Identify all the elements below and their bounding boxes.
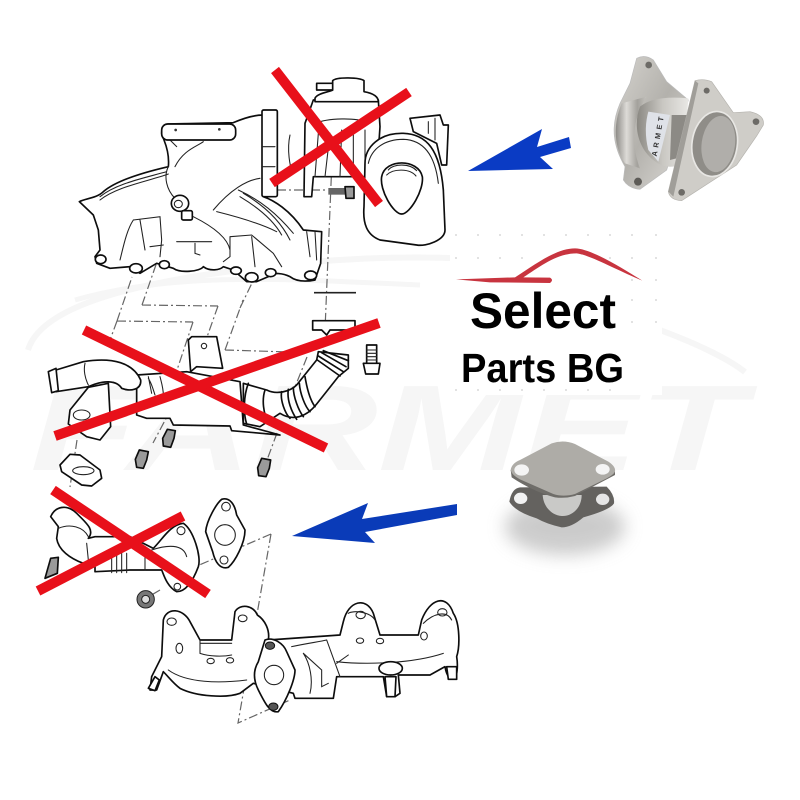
flange bore [688,108,742,180]
small bolt [328,187,354,198]
dashed assembly guide lines [70,160,332,723]
oval gasket [206,499,245,568]
red cross: EGR valve [272,70,409,204]
hex bolt [363,345,380,374]
small bolts [135,429,271,477]
rear flange [614,57,688,189]
watermark: car outline and brand: FARMET [30,360,758,496]
lower EGR body [68,383,111,440]
small gasket [60,454,102,486]
connecting tube [637,98,688,167]
left tube [56,360,141,392]
bellows pipe [243,352,348,427]
logo text: Parts BG: Parts BG [461,345,624,391]
thin seal [314,290,356,295]
hex nut [137,591,154,608]
teardrop port [381,163,422,214]
logo: red car roofline [456,248,642,283]
red cross: cooler tube [55,323,379,448]
red cross: EGR pipe [38,490,208,594]
top flange [313,321,355,335]
logo text: Select: Select [470,283,616,339]
top plate [511,470,615,498]
side connector [410,115,448,165]
manifold studs [148,662,457,697]
diagram: intake manifold with EGR valve [79,78,448,293]
lower gasket [509,487,614,527]
flange plate [262,110,277,197]
valve cap [315,78,378,102]
diagram: EGR cooler tube assembly [48,321,380,486]
outlet flange [364,133,445,245]
diagram: EGR pipe, gasket and exhaust manifold [45,499,459,712]
valve body [304,100,380,197]
logo: dotted grid [455,234,657,391]
logo: white backing panel [450,230,662,395]
soft shadow [505,498,625,555]
side stud [45,557,58,578]
mounted gasket [255,639,295,712]
manifold body [79,115,322,282]
manifold detail [100,140,317,267]
mounting bracket [188,337,223,372]
front flange [668,80,763,201]
top bracket [162,124,236,140]
mounting holes [171,195,189,211]
EGR pipe elbow [51,507,199,592]
watermark: car outline and brand [28,257,758,496]
arrow: lower blue [292,503,457,543]
photo: EGR delete pipe [614,57,763,201]
tube label [646,112,670,162]
center pipe [137,372,280,435]
arrow: upper blue [468,129,571,171]
manifold details [168,612,452,693]
manifold holes [167,609,447,664]
photo: EGR delete pipe: ARMET [650,116,666,157]
photo: EGR blanking plate [505,441,625,555]
exhaust manifold body [150,601,459,698]
